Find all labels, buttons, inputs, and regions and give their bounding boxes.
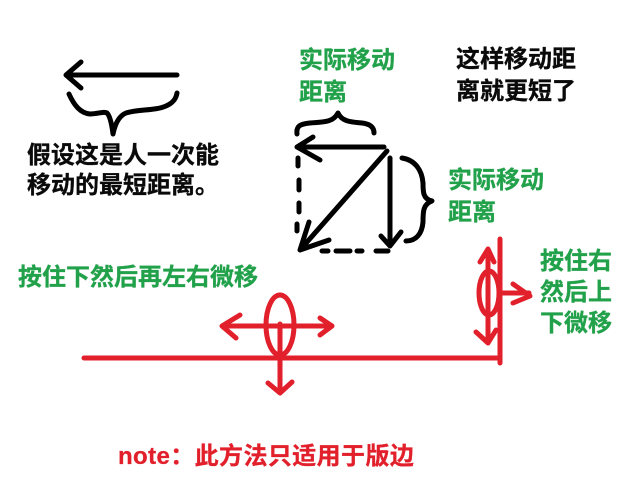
text: right actual distance label: 实际移动: [448, 167, 544, 194]
brace: right actual distance: [402, 158, 432, 241]
arrow: up and down micro move: [476, 249, 496, 343]
text: hold right instruction: 然后上: [540, 279, 612, 306]
text: hold right instruction: 按住右: [540, 248, 612, 275]
text: right actual distance label: [448, 167, 544, 226]
text: top actual distance label: 距离: [299, 79, 347, 106]
red edge: vertical: [498, 239, 502, 363]
text: hold right instruction: 下微移: [540, 310, 612, 337]
arrow: downward push: [268, 324, 292, 393]
brace: top actual distance: [297, 113, 374, 134]
text: shorter distance note: 这样移动距: [456, 46, 576, 73]
brace: under shortest move arrow: [69, 93, 177, 134]
text: top actual distance label: [299, 47, 395, 106]
dashed line: left side: [297, 158, 299, 231]
arrow: right push: [500, 284, 530, 303]
text: shorter distance note: [456, 46, 576, 105]
ellipse: bottom character: [266, 295, 294, 355]
dashed line: bottom side: [322, 248, 388, 254]
text: note: note：此方法只适用于版边: [118, 443, 414, 470]
arrow: diagonal: [300, 151, 387, 250]
text: right actual distance label: 距离: [448, 199, 496, 226]
ellipse: right character: [479, 271, 499, 315]
text: shorter distance note: 离就更短了: [456, 78, 576, 105]
text: assumption: 假设这是人一次能: [27, 142, 219, 169]
text: top actual distance label: 实际移动: [299, 47, 395, 74]
text: assumption: [27, 142, 219, 199]
arrow: left and right micro move: [222, 315, 332, 338]
text: assumption: 移动的最短距离。: [27, 172, 219, 199]
arrow: shortest single move: [66, 62, 177, 88]
red edge: horizontal: [84, 356, 497, 360]
text: hold down instruction: 按住下然后再左右微移: [18, 264, 258, 291]
arrow: down component: [381, 158, 401, 246]
arrow: left component: [297, 137, 384, 160]
text: hold right instruction: [540, 248, 612, 337]
